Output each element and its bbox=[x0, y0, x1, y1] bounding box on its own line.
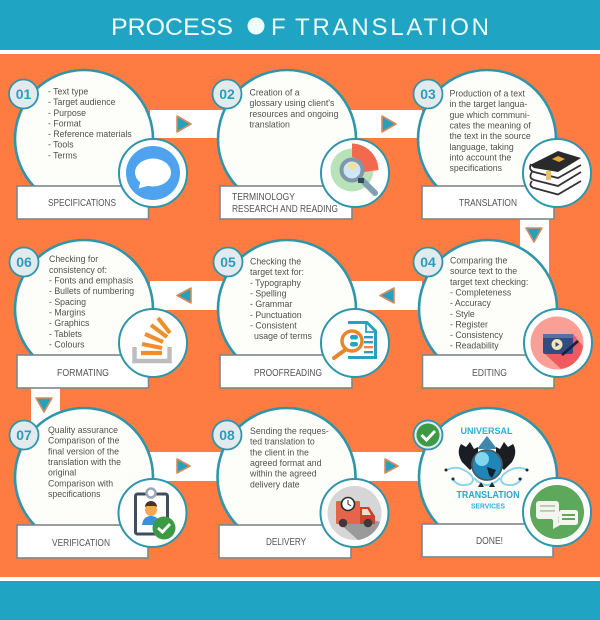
logo: universal translation services bbox=[444, 426, 528, 510]
title: F bbox=[271, 14, 286, 41]
label: terminology research and reading: RESEARCH AND READING bbox=[232, 204, 338, 215]
text: step 05: - Grammar bbox=[250, 299, 292, 309]
panel: step 06 formating bbox=[10, 240, 187, 388]
badge 01 bbox=[9, 80, 38, 108]
text: step 04: - Register bbox=[450, 320, 488, 330]
badge 08 bbox=[212, 420, 242, 450]
icon: chat bubbles bbox=[523, 478, 591, 546]
text: step 05: Checking the bbox=[250, 256, 301, 266]
text: step 05: usage of terms bbox=[254, 331, 312, 341]
text: step 05: - Typography bbox=[250, 278, 302, 288]
arrow 2 to 3 bbox=[382, 116, 396, 132]
label: delivery: DELIVERY bbox=[266, 537, 306, 548]
text: step 06: - Colours bbox=[49, 340, 85, 350]
text: step 06: - Tablets bbox=[49, 329, 83, 339]
arrow 3 to 4 bbox=[526, 228, 542, 242]
icon: video and pen bbox=[524, 309, 592, 377]
panel: step 07 verification bbox=[10, 408, 186, 558]
text: step 03: specifications bbox=[450, 163, 503, 173]
badge 05: 05 bbox=[220, 254, 236, 270]
text: step 04: - Consistency bbox=[450, 330, 504, 340]
text: step 05: - Consistent bbox=[250, 320, 297, 330]
label: translation: TRANSLATION bbox=[459, 198, 517, 209]
icon: clipboard with check bbox=[118, 479, 186, 547]
text: step 04: - Style bbox=[450, 309, 475, 319]
text: step 03: into account the bbox=[450, 152, 511, 162]
badge 06 bbox=[10, 248, 38, 276]
label: terminology research and reading: TERMINOLOGY bbox=[232, 192, 295, 203]
panel: step 02 terminology bbox=[212, 70, 389, 219]
panel: step 05 proofreading bbox=[214, 240, 389, 388]
header band bbox=[0, 0, 600, 50]
label: editing: EDITING bbox=[472, 368, 507, 379]
badge 04 bbox=[414, 248, 442, 276]
text: step 08: the client in the bbox=[250, 447, 309, 457]
text: step 04: - Accuracy bbox=[450, 298, 491, 308]
text: step 03: gue which communi- bbox=[450, 110, 530, 120]
badge 07 bbox=[10, 420, 38, 450]
arrow 7 to 8 bbox=[177, 459, 190, 473]
text: step 07: translation with the bbox=[48, 457, 121, 467]
text: step 06: Checking for bbox=[49, 254, 98, 264]
title bbox=[111, 14, 489, 41]
text: step 06: - Fonts and emphasis bbox=[49, 276, 134, 286]
text: step 03: Production of a text bbox=[450, 88, 525, 98]
text: step 02: resources and ongoing bbox=[250, 109, 339, 119]
text: step 06: consistency of: bbox=[49, 265, 107, 275]
text: step 05: - Spelling bbox=[250, 288, 287, 298]
text: step 07: final version of the bbox=[48, 446, 119, 456]
badge 08: 08 bbox=[219, 427, 235, 443]
text: step 07: original bbox=[48, 468, 76, 478]
panel: step 01 specifications bbox=[9, 70, 187, 219]
badge 05 bbox=[214, 248, 242, 276]
text: step 06: - Graphics bbox=[49, 318, 90, 328]
text: step 01: - Purpose bbox=[48, 108, 86, 118]
title: PROCESS bbox=[111, 14, 233, 41]
badge 07: 07 bbox=[16, 427, 32, 443]
text: step 02: glossary using client's bbox=[250, 98, 335, 108]
label: specifications: SPECIFICATIONS bbox=[48, 198, 116, 209]
icon: delivery truck bbox=[320, 479, 388, 547]
footer band bbox=[0, 581, 600, 620]
text: step 08: within the agreed bbox=[249, 469, 317, 479]
label: verification: VERIFICATION bbox=[52, 538, 110, 549]
badge 04: 04 bbox=[420, 254, 436, 270]
text: step 03: language, taking bbox=[450, 142, 514, 152]
connectors bbox=[31, 110, 549, 481]
text: step 06: - Spacing bbox=[49, 297, 86, 307]
text: step 03: the text in the source bbox=[450, 131, 531, 141]
panel: step 03 translation bbox=[414, 70, 591, 219]
icon: speech bubble bbox=[119, 139, 187, 207]
label: proofreading: PROOFREADING bbox=[254, 368, 322, 379]
text: step 08: ted translation to bbox=[250, 437, 315, 447]
panel: done bbox=[414, 408, 591, 557]
label: formating: FORMATING bbox=[57, 368, 109, 379]
text: step 01: - Reference materials bbox=[48, 129, 132, 139]
text: step 02: Creation of a bbox=[250, 88, 300, 98]
text: step 01: - Terms bbox=[48, 150, 78, 160]
badge 03 bbox=[414, 80, 442, 108]
text: step 07: Comparison of the bbox=[48, 436, 120, 446]
text: step 04: source text to the bbox=[450, 266, 517, 276]
logo: universal translation services: SERVICES bbox=[471, 504, 505, 510]
title: TRANSLATION bbox=[295, 14, 489, 41]
logo: universal translation services: UNIVERSAL bbox=[460, 426, 513, 437]
text: step 01: - Target audience bbox=[48, 97, 116, 107]
icon: target and magnifier bbox=[321, 139, 389, 207]
text: step 01: - Text type bbox=[48, 86, 88, 96]
icon: stack of books bbox=[523, 139, 591, 207]
text: step 04: Comparing the bbox=[450, 256, 508, 266]
text: step 05: - Punctuation bbox=[250, 310, 302, 320]
text: step 08: delivery date bbox=[250, 479, 300, 489]
label: done: DONE! bbox=[476, 536, 503, 547]
text: step 04: target text checking: bbox=[450, 277, 528, 287]
text: step 07: specifications bbox=[48, 489, 101, 499]
panel: step 04 editing bbox=[414, 240, 592, 388]
badge 02: 02 bbox=[219, 86, 235, 102]
panel: step 08 delivery bbox=[212, 408, 388, 558]
arrow 1 to 2 bbox=[177, 116, 191, 132]
badge 03: 03 bbox=[420, 86, 436, 102]
arrow 4 to 5 bbox=[380, 288, 394, 303]
text: step 03: cates the meaning of bbox=[450, 120, 531, 130]
logo: universal translation services: TRANSLATION bbox=[456, 490, 520, 501]
text: step 06: - Bullets of numbering bbox=[49, 286, 134, 296]
badge: check mark bbox=[414, 420, 442, 450]
icon: stacked bars bbox=[119, 309, 187, 377]
text: step 07: Quality assurance bbox=[48, 425, 118, 435]
arrow 5 to 6 bbox=[177, 288, 191, 303]
text: step 08: Sending the reques- bbox=[250, 426, 329, 436]
text: step 04: - Readability bbox=[450, 341, 499, 351]
arrow 8 to done bbox=[385, 459, 398, 473]
text: step 05: target text for: bbox=[250, 267, 304, 277]
text: step 08: agreed format and bbox=[250, 458, 322, 468]
badge 02 bbox=[212, 80, 242, 108]
text: step 03: in the target langua- bbox=[450, 99, 527, 109]
text: step 02: translation bbox=[250, 120, 290, 130]
text: step 01: - Format bbox=[48, 118, 82, 128]
icon: document and magnifier bbox=[321, 309, 389, 377]
text: step 06: - Margins bbox=[49, 308, 86, 318]
text: step 01: - Tools bbox=[48, 140, 74, 150]
badge 01: 01 bbox=[16, 86, 31, 102]
badge 06: 06 bbox=[16, 254, 32, 270]
arrow 6 to 7 bbox=[36, 398, 52, 412]
text: step 04: - Completeness bbox=[450, 288, 512, 298]
text: step 07: Comparison with bbox=[48, 478, 113, 488]
